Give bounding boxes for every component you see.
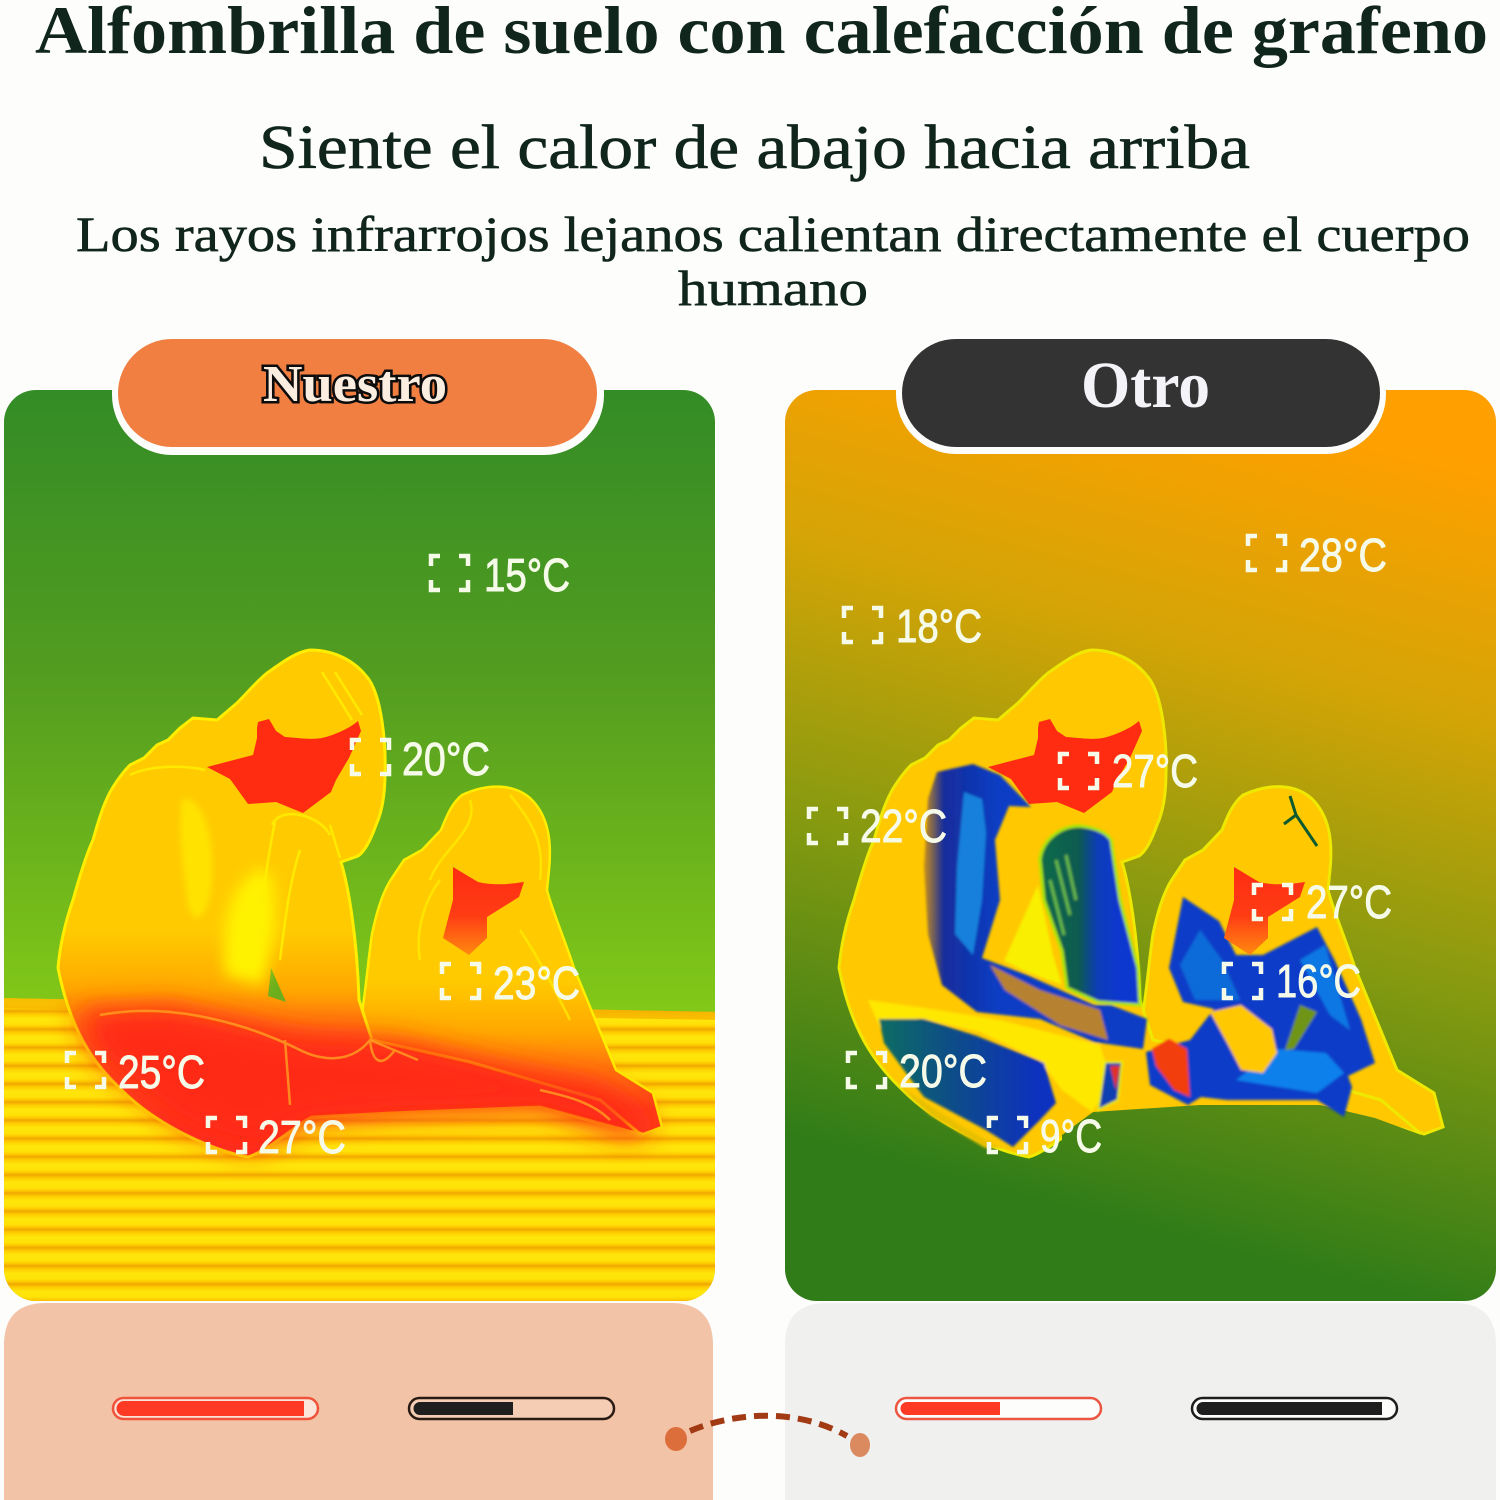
mother's blue knee — [1040, 826, 1140, 1005]
red foot — [1152, 1039, 1190, 1097]
reading 18°C: 18°C — [896, 600, 982, 652]
reading 20°C — [352, 733, 490, 785]
reading 9°C: 9°C — [1040, 1110, 1102, 1162]
reading 25°C: 25°C — [118, 1046, 205, 1098]
face heat: child — [1224, 867, 1305, 955]
dashed connector arrow between cards — [665, 1416, 870, 1457]
heated floor stripes — [0, 998, 720, 1305]
Otro red gauge — [896, 1398, 1101, 1419]
reading 16°C — [1224, 955, 1361, 1007]
face heat: child — [443, 867, 524, 955]
reading 23°C — [442, 957, 580, 1009]
description text — [76, 206, 1470, 316]
hair crack line — [1284, 796, 1317, 846]
mother's blue arm — [924, 764, 1147, 1049]
reading 25°C — [67, 1046, 205, 1098]
child's yellow hand — [1210, 1005, 1277, 1073]
reading 28°C — [1248, 529, 1387, 581]
reading 9°C — [989, 1110, 1102, 1162]
reading 15°C — [431, 549, 570, 601]
description text: humano — [678, 260, 868, 316]
reading 15°C: 15°C — [484, 549, 570, 601]
panel: Otro lower card — [785, 1303, 1496, 1500]
bright thigh region — [868, 1000, 1112, 1112]
panel: Nuestro thermal image — [0, 390, 720, 1305]
mother's blue leg — [879, 1019, 1056, 1147]
Otro label pill: Otro — [1081, 349, 1210, 422]
reading 27°C face: 27°C — [1112, 745, 1198, 797]
reading 27°C child: 27°C — [1306, 876, 1392, 928]
description text: Los rayos infrarrojos lejanos calientan directamente el cuerpo — [76, 206, 1470, 262]
panel: Nuestro lower card — [4, 1303, 713, 1500]
Otro label pill — [896, 332, 1386, 454]
reading 20°C leg — [848, 1045, 987, 1097]
reading 20°C: 20°C — [402, 733, 490, 785]
reading 22°C: 22°C — [860, 800, 947, 852]
Nuestro label pill: Nuestro — [263, 356, 447, 413]
reading 16°C: 16°C — [1276, 955, 1361, 1007]
temperature labels: Nuestro — [67, 549, 580, 1163]
face heat: mother — [988, 719, 1142, 813]
subtitle: Siente el calor de abajo hacia arriba — [259, 114, 1250, 182]
child's blue clothing — [1146, 897, 1375, 1117]
reading 27°C face — [1060, 745, 1198, 797]
reading 22°C — [809, 800, 947, 852]
panel: Otro thermal image — [785, 390, 1496, 1301]
reading 27°C: 27°C — [258, 1111, 346, 1163]
reading 18°C — [844, 600, 982, 652]
reading 27°C — [208, 1111, 346, 1163]
temperature labels: Otro — [809, 529, 1392, 1162]
reading 23°C: 23°C — [493, 957, 580, 1009]
reading 28°C: 28°C — [1299, 529, 1387, 581]
face heat: mother — [207, 719, 361, 813]
thermal figures: mother and child — [58, 650, 662, 1157]
Nuestro red gauge — [113, 1398, 318, 1419]
Nuestro black gauge — [409, 1398, 614, 1419]
Nuestro label pill — [112, 332, 604, 455]
Otro black gauge — [1192, 1398, 1397, 1419]
reading 27°C child — [1254, 876, 1392, 928]
thermal figures: mother and child with cold clothing — [839, 650, 1443, 1157]
reading 20°C leg: 20°C — [899, 1045, 987, 1097]
